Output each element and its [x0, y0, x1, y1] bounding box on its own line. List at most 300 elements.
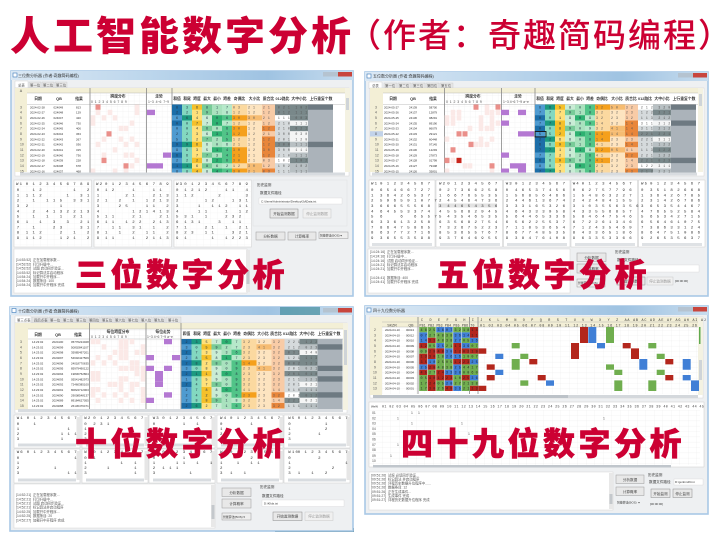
digit tables: 0 1	[17, 457, 81, 461]
digit tables: 365354467	[641, 205, 704, 209]
controls: 数据文件路径	[260, 190, 282, 195]
row labels: 7	[374, 355, 376, 359]
table rows text: 552918	[539, 133, 599, 137]
table rows text: 50802841107	[71, 345, 89, 349]
main number values: 17240520272138	[420, 382, 480, 386]
log box: [14:54:24] 加载开中开程序 完成	[16, 282, 65, 287]
table rows text: 116862	[176, 165, 236, 169]
controls: 数据文件路径	[617, 257, 639, 262]
table rows text: 15	[20, 169, 24, 173]
main number values: 35102505122325	[420, 361, 480, 365]
digit tables: 0231	[84, 423, 114, 427]
table rows text: 2024089	[52, 399, 64, 403]
table rows text: 2024-05-15	[384, 169, 399, 173]
table rows text: 3 0 2 1 0 3 1 0 2 1 0 2	[233, 159, 308, 163]
main number colour grid	[423, 327, 695, 391]
table rows text: 2 3 2 3 3 2 1 1 1 1 1 1	[243, 404, 318, 408]
data sheet: 走势	[155, 94, 163, 98]
table rows text: 1 4 1 4 1 4 2 2 1 2 2 1	[596, 132, 671, 136]
digit tables: 01234567	[447, 182, 502, 186]
data sheet: 大小比	[249, 96, 260, 101]
tabs: 第一位	[30, 82, 41, 88]
log box: [09:51:26] 评程历史数据升位程序中......	[371, 480, 431, 486]
digit tables: 01234567	[162, 451, 217, 455]
lower frequency table: 1	[397, 416, 399, 420]
controls: 计算概率	[584, 266, 599, 271]
table rows text: 2024090	[52, 393, 64, 397]
table rows text: 221918	[176, 112, 236, 116]
lower frequency table: 1	[411, 411, 413, 415]
digit tables: 32 1	[17, 205, 67, 209]
data sheet: 012路比	[276, 96, 290, 101]
log box: [09:51:26] 正在生成事件...	[371, 489, 411, 494]
table rows text: 54602427509	[71, 356, 89, 360]
row labels: 00006	[406, 360, 414, 364]
digit tables: 136426785	[641, 194, 704, 198]
row labels: 00012	[406, 333, 414, 337]
digit tables: 81 1 2 11 2	[97, 232, 173, 236]
digit tables: W5	[288, 417, 296, 421]
controls: D:\Kl\ds.txt	[264, 502, 278, 506]
table rows text: 5	[20, 116, 22, 120]
table rows text: 86079	[429, 127, 437, 131]
data sheet: 日期	[34, 332, 42, 337]
controls: 智能算法(BOS) ▾	[223, 514, 245, 519]
row labels: 00008	[406, 349, 414, 353]
table rows text: 4	[20, 345, 22, 349]
data sheet: 跨度分布	[465, 94, 481, 98]
digit tables: 863772716	[371, 232, 434, 236]
lower frequency table: 1	[418, 411, 420, 415]
table rows text: 14:23:02	[32, 345, 44, 349]
digit tables: 3 1	[17, 438, 68, 442]
table rows text: 305927	[186, 346, 245, 350]
table rows text: 2024096	[52, 361, 64, 365]
data sheet: 奇偶比	[243, 331, 255, 336]
row labels: 10	[373, 371, 377, 375]
table rows text: 285817	[186, 357, 245, 361]
controls: 智能算法(BOS) ▾	[320, 232, 342, 238]
digit tables: 3	[153, 438, 160, 442]
row labels: 11	[373, 376, 377, 380]
table rows text: 3 0 1 2 1 2 2 1 0 0 2 1	[233, 127, 308, 131]
digit tables: 3	[288, 438, 295, 442]
lower frequency table: 1	[390, 454, 392, 458]
panel: ten digit analysis window: 十位数分析器 (作者:奇趣简码编程)	[18, 308, 80, 314]
table rows text: 2024097	[52, 356, 64, 360]
table rows text: 2024-02-18	[30, 159, 45, 163]
lower frequency table: 07	[372, 443, 376, 447]
table rows text: 2024-05-27	[384, 105, 399, 109]
table rows text: 3 2 4 1 1 4 3 1 1 2 1 2	[596, 127, 671, 131]
log box: [14:53:52] 正在加载程序数...	[16, 257, 60, 262]
log box: [09:51:27] 生成事件 完成	[371, 493, 410, 498]
digit tables: 245464736	[439, 200, 502, 204]
table rows text: 11	[375, 148, 379, 152]
digit tables: 242484155	[573, 200, 636, 204]
digit tables: 01234567	[162, 417, 217, 421]
data sheet: 最小	[576, 96, 584, 101]
table rows text: 5	[20, 351, 22, 355]
table rows text: 7	[20, 127, 22, 131]
log box: [14:54:24] 加载开中开程序...	[16, 274, 60, 279]
digit tables: 01234567	[298, 417, 352, 421]
table rows text	[375, 105, 671, 174]
digit tables: 01234567	[27, 417, 81, 421]
digit tables: 6131 3 11	[176, 221, 246, 225]
table rows text: 008909	[539, 128, 599, 132]
lower frequency table: 06	[372, 438, 376, 442]
table rows text: 235707	[186, 341, 245, 345]
digit tables: 937646955	[439, 237, 502, 241]
data sheet: 结果	[429, 96, 437, 101]
table rows text: 12	[20, 153, 24, 157]
table rows text: 2024093	[52, 377, 64, 381]
table rows text: 024044	[54, 132, 64, 136]
table rows text: 887909	[539, 165, 599, 169]
table rows text: 185909	[186, 378, 245, 382]
digit tables: 344654356	[439, 205, 502, 209]
table rows text: 11	[20, 383, 24, 387]
digit tables: 065466727	[371, 189, 434, 193]
table rows text: 024038	[54, 164, 64, 168]
table rows text: 2 3 4 1 3 2 2 0 1 0 2 1	[243, 367, 318, 371]
tabs: 第七位	[128, 318, 139, 322]
digit tables: 156856466	[506, 194, 569, 198]
data sheet: 大中小比	[291, 96, 307, 101]
digit tables: 1	[84, 428, 91, 432]
digit tables: 3 1	[84, 472, 141, 476]
table rows text: 12	[20, 388, 24, 392]
tabs: 第四位	[427, 83, 438, 88]
lower frequency table: 1	[468, 432, 470, 436]
digit tables: 433556857	[573, 210, 636, 214]
row labels: 2024-04-10	[385, 328, 400, 332]
digit tables: W9	[220, 451, 227, 455]
digit tables: 2 1	[17, 467, 61, 471]
table rows text: 024042	[54, 143, 64, 147]
table rows text: 2024092	[52, 383, 64, 387]
row labels: 2024-04-10	[385, 344, 400, 348]
lower frequency table: 1	[461, 422, 463, 426]
digit distribution cells	[93, 339, 176, 403]
table rows text: 80824712003	[71, 388, 89, 392]
panel: five digit analysis window	[365, 72, 708, 296]
data sheet: 质合比	[270, 331, 282, 336]
table rows text: 14:23:02	[32, 383, 44, 387]
table rows text: 228	[76, 159, 81, 163]
digit tables: 867748535	[506, 232, 569, 236]
tabs	[369, 82, 453, 88]
digit tables: W8	[153, 451, 160, 455]
digit tables: 2 12 131	[176, 200, 252, 204]
table rows text: 2024-02-19	[30, 153, 45, 157]
controls: 分析数据	[623, 477, 638, 482]
table rows text: 24139	[409, 105, 417, 109]
data sheet: 奇偶比	[234, 96, 245, 101]
controls: 历史监测	[615, 249, 630, 254]
digit tables: W7	[84, 451, 92, 455]
table rows text: 996606	[176, 144, 236, 148]
controls: 计算概率	[229, 501, 244, 506]
digit tables: 0 1	[153, 457, 190, 461]
table rows text: 211808	[186, 373, 245, 377]
digit tables: W2	[84, 417, 92, 421]
digit tables: 3103556356	[573, 205, 643, 209]
digit tables: 1 1	[220, 428, 244, 432]
row labels: 00003	[406, 376, 414, 380]
table rows text: 2 1 1 2 1 2 3 0 0 1 1 1	[233, 143, 308, 147]
tabs: 第二位	[63, 318, 74, 322]
table rows text: 10	[375, 143, 379, 147]
row labels: 2024-04-10	[385, 339, 400, 343]
digit tables: 738633124	[641, 226, 704, 230]
table rows text: 024045	[54, 127, 64, 131]
digit tables: 1 2	[288, 428, 332, 432]
data sheet: 大小比	[257, 331, 269, 336]
data sheet: 和尾	[183, 96, 191, 101]
table rows text: 2 3 4 1 3 2 2 1 2 0 2 3	[243, 345, 318, 349]
digit tables: 2 111	[17, 433, 81, 437]
lower frequency table: 03	[372, 422, 376, 426]
data sheet: QB	[408, 323, 414, 327]
table rows text: 2024-05-16	[384, 164, 399, 168]
table rows text: 2024100	[52, 340, 64, 344]
digit tables: 2 1 1	[84, 467, 141, 471]
table rows text: 664606	[176, 117, 236, 121]
row labels: 00005	[406, 365, 414, 369]
row labels: 2024-04-10	[385, 355, 400, 359]
log box: [14:53:52] 打印升级中...	[16, 261, 53, 266]
digit tables: 01234567	[380, 182, 434, 186]
digit tables: W1	[371, 182, 378, 186]
digit tables: 0 1	[17, 423, 40, 427]
table rows text: 24137	[409, 111, 417, 115]
table rows text: 3 2 2 3 1 4 2 2 1 0 2 1	[243, 399, 318, 403]
lower frequency table: 01	[372, 411, 376, 415]
panel: five digit analysis window: 五位数分析器 (作者:奇趣简码编程)	[373, 72, 435, 78]
table rows text: 9	[20, 372, 22, 376]
main number values: 12052521133607	[420, 345, 480, 349]
tabs: 第三位	[413, 83, 424, 88]
table rows text: 60448	[429, 137, 437, 141]
digit tables: 1 1	[17, 428, 74, 432]
main number values: 07274838361411	[420, 334, 480, 338]
data sheet: 跨度	[193, 96, 201, 101]
controls: 开始监测数据	[277, 514, 299, 518]
digit tables: W2	[439, 182, 446, 186]
controls: 数据文件路径	[262, 493, 284, 498]
table rows text: 993514	[176, 149, 236, 153]
table rows text: 7	[20, 361, 22, 365]
table rows text: 24132	[409, 137, 417, 141]
digit tables: 71 21 1 21	[176, 226, 252, 230]
data sheet: 和值	[536, 96, 544, 101]
controls: 计算概率	[623, 489, 638, 494]
digit tables: 926535637	[641, 237, 704, 241]
digit tables: 166765535	[439, 194, 502, 198]
digit tables: 564465336	[506, 216, 569, 220]
table rows text: 2024098	[52, 351, 64, 355]
data sheet: 和值	[173, 96, 181, 101]
table rows text: 552725	[176, 138, 236, 142]
table rows text: 13	[20, 393, 24, 397]
table rows text: 3	[20, 340, 22, 344]
table rows text: 2024-05-20	[384, 143, 399, 147]
table rows text: 2024-05-22	[384, 132, 399, 136]
data sheet: 日期	[34, 96, 42, 101]
row labels: 8	[374, 360, 376, 364]
table rows text: 226808	[539, 138, 599, 142]
table rows text: 14:23:02	[32, 377, 44, 381]
row labels	[373, 328, 414, 391]
table rows text: 1 2 1 2 2 1 3 0 0 0 3 0	[233, 132, 308, 136]
data sheet: 1~3 4~6 7~9 a~e	[147, 335, 173, 339]
digit tables: 046537456	[506, 189, 569, 193]
digit tables: 464333958	[506, 210, 569, 214]
data sheet: 最小	[213, 96, 221, 101]
digit tables: 9112 121 2	[17, 237, 94, 241]
digit tables: 2 1 115 331	[17, 200, 94, 204]
controls: 历史监测	[257, 182, 272, 187]
table rows text: 2024091	[52, 388, 64, 392]
digit tables: 712435469	[573, 226, 636, 230]
digit tables: 584647546	[573, 216, 636, 220]
digit tables: 0 1	[288, 423, 332, 427]
table rows text: 2024-05-24	[384, 121, 399, 125]
table rows text: 1 2 1 2 1 2 2 1 0 1 1 1	[233, 121, 308, 125]
digit tables: 543546535	[439, 216, 502, 220]
table rows text: 79408	[429, 164, 437, 168]
controls: 开始监测数据	[620, 278, 642, 284]
digit tables: 672261346	[573, 221, 636, 225]
data sheet: 012路比	[283, 331, 297, 336]
table rows text: 3 2 0 5 4 1 1 1 3 1 2 2	[596, 148, 671, 152]
digit tables: 1 21 213	[97, 194, 173, 198]
table rows text: 278808	[186, 389, 245, 393]
table rows text: 12	[375, 153, 379, 157]
digit tables: 7 1 23 31	[17, 226, 94, 230]
data sheet: 跨差	[586, 96, 594, 101]
table rows text: 772826	[539, 154, 599, 158]
data sheet: 最大	[566, 96, 574, 101]
digit tables: 1	[17, 462, 24, 466]
table rows text: 89184627055	[71, 399, 89, 403]
table rows text: 24127	[409, 164, 417, 168]
digit tables: 01234567	[93, 417, 148, 421]
table rows text: 3 2 5 0 3 2 2 1 2 3 2 0	[596, 105, 671, 109]
digit tables: 1 1	[288, 462, 352, 466]
heatmap columns	[186, 339, 330, 410]
row labels: 00001	[406, 387, 414, 391]
table rows text: 2024-02-20	[30, 148, 45, 152]
table rows text: 4	[20, 111, 22, 115]
controls: 开始监测	[653, 491, 668, 496]
digit tables: 31 1 2	[288, 472, 332, 476]
data sheet: C D E F G H I J K L M N O P Q R S T U V W X Y Z AA AB AC AD AE AF AG AH AI AJ	[421, 319, 707, 323]
row labels: 00002	[406, 381, 414, 385]
data sheet: 跨度分布	[110, 94, 126, 98]
digit tables: 4 121413	[97, 210, 173, 214]
controls: 智能算法(BOS) ▾	[617, 500, 640, 504]
digit tables: 633613258	[371, 221, 434, 225]
digit tables: 2111	[153, 467, 183, 471]
data sheet: 每位走势	[155, 329, 171, 334]
log box	[369, 472, 613, 510]
row labels: 2024-04-10	[385, 371, 400, 375]
table rows text: 2024-02-21	[30, 143, 45, 147]
tabs: 第五位	[102, 318, 113, 322]
row labels: 00007	[406, 355, 414, 359]
table rows text: 4 1 2 3 1 4 1 3 1 1 2 2	[596, 143, 671, 147]
table rows text: 773808	[539, 170, 599, 174]
table rows text: 2024-02-24	[30, 127, 45, 131]
table rows text: 1 4 2 3 2 3 2 2 1 3 1 1	[596, 137, 671, 141]
controls: 分析数据	[229, 490, 244, 495]
tabs	[15, 316, 181, 323]
table rows text: 2024-05-26	[384, 111, 399, 115]
table rows text: 2 3 2 3 3 2 1 2 1 1 1 3	[243, 356, 318, 360]
data sheet: 1~3 4~6 7~9	[148, 100, 169, 104]
table rows text: 665808	[539, 106, 599, 110]
table rows text: 14	[375, 164, 379, 168]
table rows text: 3 2 2 3 3 2 1 1 3 2 1 2	[596, 116, 671, 120]
lower frequency table: 1	[603, 416, 605, 420]
digit tables: 2	[220, 467, 227, 471]
digit tables: 01234567	[230, 451, 284, 455]
table rows text: 223633	[176, 133, 236, 137]
digit tables: 711853654	[506, 226, 569, 230]
table rows text: 24128	[409, 159, 417, 163]
table rows text: 2024095	[52, 367, 64, 371]
digit tables: 843365186	[573, 232, 636, 236]
row labels: 5	[374, 344, 376, 348]
table rows text: 667734	[176, 154, 236, 158]
table rows text: 2 3 2 3 3 2 2 0 1 0 1 0	[243, 372, 318, 376]
table rows text: 14:23:02	[32, 356, 44, 360]
digit tables: 635682754	[439, 221, 502, 225]
data sheet	[15, 323, 348, 413]
lower frequency table: 01 02 03 04 05 06 07 08 09 10 11 12 13 14 15 16 17 18 19 20 21 22 23 24 25 26 27 28 29 30 31 32 33 34 35 36 37 38 39 40 41 42 43 44 45	[382, 406, 704, 410]
table rows text: 29121	[429, 132, 437, 136]
log box: [09:51:27] 评程历史数据升位程序 完成	[371, 497, 430, 502]
selected cell	[535, 132, 546, 137]
digit tables: 936553598	[371, 237, 434, 241]
digit tables: 1 1 1	[84, 462, 141, 466]
table rows text: 14:23:02	[32, 388, 44, 392]
table rows text: 89190	[429, 121, 437, 125]
data sheet: 大中小比	[654, 96, 670, 101]
panel: three digit analysis window: 三位数分析器 (作者:奇趣简码编程)	[18, 72, 80, 78]
table rows text: 8	[375, 132, 377, 136]
digit tables: 2	[153, 433, 160, 437]
data sheet: 奇偶比	[596, 96, 608, 101]
table rows text: 27873	[429, 153, 437, 157]
log box: [14:24:41] 加载开中开程序 完成	[370, 279, 419, 284]
controls: 停止监测数据	[649, 278, 671, 284]
table rows text: 242909	[186, 394, 245, 398]
digit distribution cells	[447, 104, 530, 174]
digit tables: 455682945	[439, 210, 502, 214]
main number values: 09294030120219	[420, 350, 480, 354]
table rows text: 2024-02-17	[30, 164, 45, 168]
digit tables: 656225537	[506, 221, 569, 225]
digit tables: 01234567	[230, 417, 284, 421]
digit tables: 4 2 4132213	[17, 210, 94, 214]
tabs: 第六位	[115, 318, 126, 322]
digit tables: 062757796	[573, 189, 636, 193]
table rows text: 4	[375, 111, 377, 115]
